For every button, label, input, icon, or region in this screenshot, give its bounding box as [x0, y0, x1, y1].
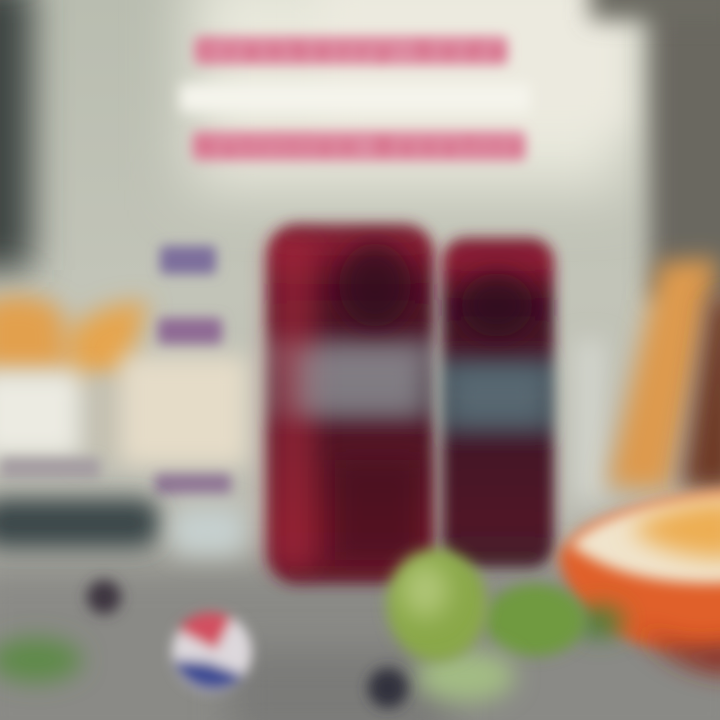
flag badge: [172, 612, 252, 692]
left food: white block: [0, 356, 248, 466]
title: white middle band: [180, 84, 530, 112]
dark berries: [87, 580, 408, 708]
tall can: [268, 224, 434, 584]
title: second line: Nutrition Benefits: [196, 131, 522, 161]
table surface: [0, 565, 720, 720]
orange wedge: [608, 258, 720, 490]
orange fruit bowl: [558, 490, 720, 675]
title: first line: Cranberry Soda: [198, 35, 505, 65]
lime green fruits: [387, 549, 624, 702]
green leaf: [0, 638, 82, 682]
dark dish: [0, 498, 244, 554]
label chips: [0, 246, 231, 494]
left food: orange pieces: [0, 296, 148, 380]
short can: [442, 238, 554, 568]
